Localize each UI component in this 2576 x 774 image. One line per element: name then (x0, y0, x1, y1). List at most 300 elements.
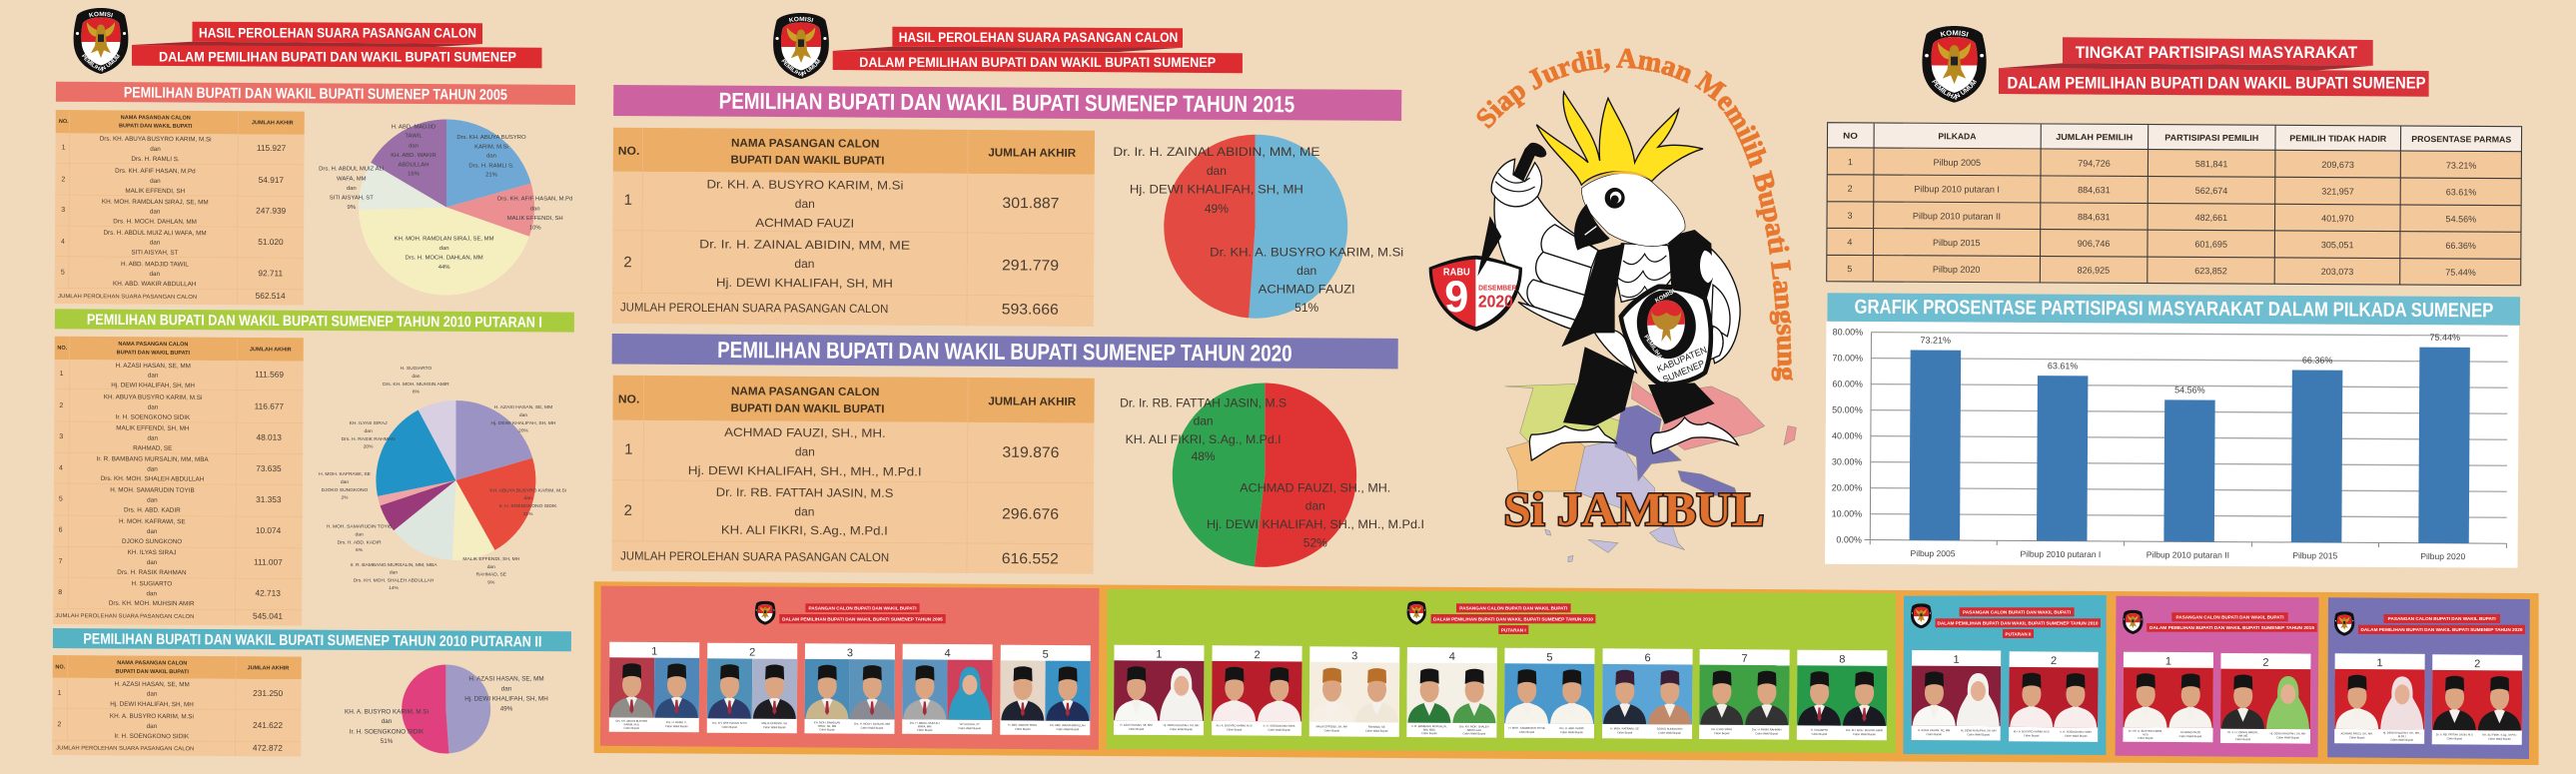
pie chart 2010 round I: dan (519, 412, 527, 418)
table 2005: Drs. H. MOCH. DAHLAN, MM (113, 218, 197, 226)
candidate card 8: Calon Wakil Bupati (1853, 732, 1876, 736)
table 2010 round I (53, 337, 304, 626)
table 2010 round II: 231.250 (253, 688, 284, 698)
panel: results 2005 (55, 82, 575, 306)
participation table: Pilbup 2015 (1933, 238, 1981, 248)
table 2010 round I: 7 (58, 558, 62, 565)
candidate card 2: MM, ME (2237, 734, 2248, 738)
y axis labels: 70.00% (1832, 353, 1863, 364)
y axis labels: 20.00% (1832, 482, 1862, 493)
pie chart 2020: KH. ALI FIKRI, S.Ag., M.Pd.I (1126, 432, 1282, 446)
value labels: 75.44% (2429, 333, 2460, 343)
pie chart 2020 (1120, 383, 1424, 567)
participation table: 54.56% (2446, 214, 2476, 224)
candidate card 1: Calon Bupati (2138, 736, 2153, 740)
table 2015 (612, 128, 1095, 327)
y axis labels: 80.00% (1833, 327, 1863, 338)
table 2015: 291.779 (1002, 257, 1059, 275)
candidate card 6: Calon Wakil Bupati (1658, 731, 1681, 735)
middle logo (773, 13, 829, 79)
participation table: 63.61% (2446, 187, 2476, 197)
heading 2020: PEMILIHAN BUPATI DAN WAKIL BUPATI SUMENEP TAHUN 2020 (717, 337, 1292, 367)
pie chart 2010 round I: Ir. R. BAMBANG MURSALIN, MM, MBA (351, 562, 437, 568)
candidate card 5: KH. ABD. WAKIR ABDULLAH (1050, 723, 1086, 727)
panel header 2020 (2334, 611, 2525, 636)
candidate card 1: KARIM, M.Si (624, 722, 639, 726)
date shield: 2020 (1478, 291, 1513, 312)
candidate card 2: KH. ALI FIKRI, S.Ag., M.Pd.I (2482, 733, 2517, 737)
right logo: KOMISI (1940, 30, 1969, 37)
candidate card 5: 5 (1043, 648, 1049, 661)
table 2015: Hj. DEWI KHALIFAH, SH, MH (716, 276, 893, 291)
table 2005: NO. (59, 119, 69, 125)
pie chart 2015: 51% (1294, 301, 1319, 315)
middle title banner: HASIL PEROLEHAN SUARA PASANGAN CALON (899, 29, 1178, 45)
candidate card 4: Drs. H. ABDUL MUIZ ALI (910, 721, 940, 725)
pie chart 2010 round I (319, 366, 566, 591)
candidate card 4 (902, 644, 993, 734)
pie chart 2005: KARIM, M.Si (474, 144, 508, 150)
panel header 2005: PASANGAN CALON BUPATI DAN WAKIL BUPATI (809, 605, 917, 611)
candidate card 4: ABDULLAH (1467, 728, 1481, 732)
table 2005: KH. MOH. RAMDLAN SIRAJ, SE, MM (102, 199, 209, 206)
crest (1536, 92, 1703, 185)
table 2010 round I: Hj. DEWI KHALIFAH, SH, MH (111, 382, 195, 389)
table 2005: Drs. H. RAMLI S. (131, 156, 180, 163)
participation table: 203,073 (2321, 267, 2353, 277)
candidate card 2: Calon Bupati (1227, 727, 1243, 731)
table 2010 round II: NO. (55, 664, 66, 670)
pie chart 2005: KH. ABD. WAKIR (391, 153, 436, 159)
pie chart 2020: 52% (1303, 535, 1327, 549)
candidate card 2: Calon Bupati (2235, 737, 2251, 741)
candidate card 1: M.Pd.I (2398, 734, 2406, 738)
table 2015: NO. (618, 146, 639, 158)
y axis labels: 10.00% (1832, 508, 1862, 519)
table 2010 round I: H. AZASI HASAN, SE, MM (116, 363, 191, 370)
candidate card 3: RAHMAD, SE (1368, 725, 1385, 729)
table 2020: dan (794, 504, 815, 518)
candidate card 3 (804, 643, 895, 734)
table 2010 round I: 3 (59, 433, 63, 440)
candidate card 7 (1699, 649, 1790, 740)
panel: results 2020 (612, 334, 1424, 574)
pie chart 2020: dan (1194, 414, 1214, 428)
table 2010 round I: 31.353 (256, 494, 282, 504)
candidate card 1 (2334, 653, 2425, 744)
panel header 2015 (2123, 610, 2317, 634)
candidate card 3: SIRAJ, SE, MM (818, 724, 837, 728)
table 2010 round I: 545.041 (253, 611, 283, 621)
pie chart 2010 round I: dan (487, 564, 495, 570)
table 2010 round I: NAMA PASANGAN CALON (118, 342, 188, 348)
table 2010 round II: 2 (57, 721, 61, 728)
value labels: 73.21% (1920, 336, 1951, 346)
candidate card 4: 4 (1449, 651, 1455, 663)
participation table: PEMILIH TIDAK HADIR (2289, 133, 2386, 144)
candidate card 1: H. AZASI HASAN, SE, MM (1120, 723, 1153, 727)
candidate card 5 (1000, 645, 1091, 735)
table 2020: BUPATI DAN WAKIL BUPATI (730, 402, 885, 415)
pie chart 2010 round II: 51% (381, 738, 394, 745)
table 2010 round II (52, 655, 302, 757)
table 2010 round I: 48.013 (256, 432, 282, 442)
table 2015: 1 (624, 192, 632, 209)
map of Sumenep (1505, 382, 1796, 562)
table 2010 round I: H. MOH. KAFRAWI, SE (119, 518, 186, 525)
candidate card 1: 1 (1954, 654, 1960, 666)
candidate card 3: 3 (847, 647, 853, 659)
raised wing (1494, 192, 1740, 373)
table 2010 round I: Drs. KH. MOH. SHALEH ABDULLAH (101, 475, 205, 483)
table 2010 round II: dan (147, 691, 158, 698)
pie chart 2010 round I: Drs. H. ABD. KADIR (338, 539, 382, 545)
table 2010 round I: 73.635 (256, 463, 282, 473)
candidate card 3: Calon Wakil Bupati (861, 726, 884, 730)
middle logo: PEMILIHAN UMUM (781, 59, 821, 77)
table 2010 round II: JUMLAH AKHIR (248, 665, 289, 671)
panel: candidates 2015 (2116, 596, 2319, 757)
table 2020: ACHMAD FAUZI, SH., MH. (724, 425, 886, 440)
pie chart 2015: Hj. DEWI KHALIFAH, SH, MH (1130, 183, 1303, 197)
table 2005: 54.917 (259, 175, 284, 185)
candidate card 1: 1 (2165, 655, 2171, 668)
pie chart 2005: 44% (438, 265, 450, 271)
table 2010 round I: KH. ILYAS SIRAJ (128, 549, 176, 556)
pie chart 2005: 10% (529, 225, 541, 231)
table 2010 round II: dan (147, 723, 158, 730)
value labels: 63.61% (2048, 361, 2078, 371)
candidate card 8 (1797, 650, 1887, 740)
candidate card 8: Drs. KH. MOH. MUHSIN AMIR (1846, 728, 1883, 732)
heading 2005: PEMILIHAN BUPATI DAN WAKIL BUPATI SUMENEP TAHUN 2005 (124, 84, 507, 104)
table 2010 round I: NO. (57, 346, 68, 352)
table 2015: JUMLAH AKHIR (988, 147, 1077, 160)
candidate card 1 (609, 642, 699, 732)
value labels (1920, 330, 2460, 396)
candidate card 4: Calon Wakil Bupati (1463, 731, 1486, 735)
pie chart 2015 (1113, 135, 1403, 319)
participation table: 581,841 (2195, 159, 2227, 169)
candidate card 1: 1 (651, 645, 657, 658)
participation table: Pilbup 2010 putaran I (1914, 184, 2000, 195)
candidate card 1: Calon Wakil Bupati (1170, 727, 1193, 731)
table 2005: dan (150, 271, 161, 278)
candidate card 2: 2 (1254, 649, 1261, 661)
chest and vest (1561, 230, 1715, 347)
candidate card 5: Calon Wakil Bupati (1056, 727, 1079, 731)
right logo (1922, 26, 1987, 103)
panel: results 2015 (612, 85, 1403, 327)
left logo: KOMISI (89, 12, 113, 18)
pie chart 2005: dan (486, 154, 496, 160)
beak (1574, 204, 1610, 251)
candidate card 4: Drs. KH. MOH. SHALEH (1459, 724, 1489, 729)
candidate card 5 (1504, 648, 1594, 738)
candidate card 2 (707, 643, 797, 733)
pie chart 2010 round I: H. AZASI HASAN, SE, MM (494, 404, 552, 410)
candidate card 6: 6 (1644, 652, 1651, 664)
right title banner: DALAM PEMILIHAN BUPATI DAN WAKIL BUPATI SUMENEP (2008, 74, 2425, 92)
candidate card 3: MALIK EFFENDI, SH, MH (1316, 724, 1347, 729)
y axis labels: 0.00% (1836, 534, 1862, 545)
table 2015: dan (794, 257, 815, 271)
pie chart 2020: Dr. Ir. RB. FATTAH JASIN, M.S (1120, 395, 1287, 409)
panel: candidates 2010 round I (1107, 589, 1896, 753)
x axis labels: Pilbup 2020 (2420, 551, 2466, 561)
participation table: 401,970 (2321, 214, 2354, 224)
y axis labels: 30.00% (1832, 456, 1862, 467)
table 2005: 3 (61, 207, 65, 214)
panel header 2020: DALAM PEMILIHAN BUPATI DAN WAKIL BUPATI SUMENEP TAHUN 2020 (2361, 627, 2523, 632)
pie chart 2010 round I: 14% (389, 585, 400, 591)
candidate card 3: Calon Bupati (819, 727, 835, 731)
candidate card 4: 4 (945, 647, 951, 660)
panel: candidates 2005 (600, 586, 1099, 750)
KPU shield: PEMILIHAN (1642, 335, 1665, 364)
candidate card 2: Calon Wakil Bupati (763, 725, 786, 729)
pie chart 2010 round I: 21% (523, 511, 533, 517)
table 2005: 4 (61, 239, 65, 246)
candidate card 2: Dr. Ir. RB. FATTAH JASIN, M.S (2436, 732, 2473, 737)
chart background (1825, 322, 2519, 568)
table 2020: JUMLAH AKHIR (988, 395, 1077, 408)
pie chart 2010 round I: dan (524, 495, 532, 501)
candidate card 4: Calon Bupati (1421, 731, 1437, 735)
table 2010 round I: BUPATI DAN WAKIL BUPATI (117, 350, 191, 357)
participation table: JUMLAH PEMILIH (2056, 132, 2133, 142)
participation table: 794,726 (2078, 158, 2111, 169)
table 2010 round I: dan (148, 404, 159, 411)
table 2005: H. ABD. MADJID TAWIL (121, 261, 189, 269)
table 2010 round II: 1 (58, 690, 62, 697)
table 2020: 1 (624, 441, 632, 458)
pie chart 2005: TAWIL (405, 134, 423, 140)
candidate card 3: Drs. H. MOCH. DAHLAN, MM (854, 722, 891, 726)
participation table: PILKADA (1938, 131, 1976, 141)
pie chart 2005: SITI AISYAH, ST (330, 195, 374, 201)
candidate card 2: 2 (749, 646, 755, 659)
candidate card 1: Hj. DEWI KHALIFAH, SH., MH., (2383, 731, 2421, 735)
table 2005: dan (150, 240, 161, 247)
candidate card 1: M.Si (2143, 732, 2148, 736)
pie chart 2010 round I: 9% (487, 579, 495, 585)
candidate card 5: H. MOH. SAMARUDIN TOYIB (1508, 726, 1545, 730)
middle title banner (833, 27, 1243, 73)
pie chart 2010 round I: Ir. H. SOENGKONO SIDIK (499, 503, 557, 509)
participation table: 562,674 (2195, 186, 2227, 196)
candidate card 4: Ir. R. BAMBANG MURSALIN, (1411, 724, 1447, 728)
pie chart 2010 round II: KH. A. BUSYRO KARIM, M.Si (345, 709, 429, 715)
table 2015: Dr. Ir. H. ZAINAL ABIDIN, MM, ME (699, 237, 910, 253)
table 2005: 2 (61, 177, 65, 184)
pie chart 2005: dan (439, 246, 449, 252)
pie chart 2010 round I: KH. ABUYA BUSYRO KARIM, M.Si (489, 487, 566, 493)
panel header 2010 round I: PUTARAN I (1501, 627, 1526, 632)
table 2005 (55, 110, 305, 306)
table 2010 round I: 116.677 (255, 401, 284, 411)
pie chart 2010 round II: Hj. DEWI KHALIFAH, SH, MH (464, 695, 548, 703)
candidate card 1: Calon Bupati (2349, 735, 2365, 739)
table 2010 round I: dan (147, 528, 158, 535)
pie chart 2010 round I: Drs. KH. MOH. SHALEH ABDULLAH (354, 577, 434, 583)
table 2010 round I: 42.713 (255, 588, 281, 598)
pie chart 2005: Drs. KH. ABUYA BUSYRO (456, 135, 526, 141)
participation table: 601,695 (2194, 239, 2227, 250)
table 2005: JUMLAH PEROLEHAN SUARA PASANGAN CALON (58, 294, 197, 301)
KPU shield: KOMISI (1654, 288, 1676, 305)
candidate card 1 (1912, 650, 2001, 741)
participation table: PARTISIPASI PEMILIH (2164, 133, 2258, 143)
pie chart 2010 round II: dan (382, 718, 393, 725)
participation table: 4 (1847, 237, 1852, 247)
panel header 2015: PASANGAN CALON BUPATI DAN WAKIL BUPATI (2175, 615, 2283, 619)
date shield: RABU (1443, 267, 1470, 279)
panel: candidates 2010 round II (1903, 595, 2107, 755)
panel: results 2010 round I (53, 309, 574, 626)
participation table: 2 (1848, 184, 1853, 194)
participation table: 5 (1847, 264, 1852, 274)
participation table: 482,661 (2195, 213, 2227, 223)
candidate card 1: Calon Wakil Bupati (2179, 734, 2202, 738)
table 2015: ACHMAD FAUZI (755, 216, 854, 231)
table 2010 round I: 6 (59, 527, 63, 534)
participation table: 73.21% (2446, 161, 2476, 171)
table 2005: 92.711 (258, 268, 284, 278)
table 2010 round I: dan (147, 590, 158, 597)
y axis labels: 50.00% (1832, 404, 1863, 415)
KPU shield: SUMENEP (1661, 359, 1706, 385)
table 2010 round I: dan (148, 435, 159, 442)
table 2010 round I: 4 (59, 465, 63, 472)
panel header 2010 round I (1407, 601, 1595, 634)
candidate card 2: Calon Wakil Bupati (2276, 735, 2299, 739)
pie chart 2005: Drs. H. ABDUL MUIZ ALI (319, 167, 385, 173)
table 2020: JUMLAH PEROLEHAN SUARA PASANGAN CALON (620, 548, 889, 564)
table 2010 round I: JUMLAH PEROLEHAN SUARA PASANGAN CALON (55, 613, 194, 620)
pie chart 2010 round I: RAHMAD, SE (476, 571, 507, 577)
candidate card 1 (2123, 652, 2213, 742)
pie chart 2010 round I: KH. ILYAS SIRAJ (350, 420, 388, 426)
date shield: 9 (1444, 272, 1468, 322)
table 2010 round II: 472.872 (253, 743, 283, 753)
pie chart 2005: dan (530, 207, 540, 213)
legs (1563, 347, 1715, 426)
candidate card 6: DJOKO SUNGKONO (1657, 727, 1682, 731)
table 2010 round I: Drs. H. RASIK RAHMAN (117, 569, 187, 576)
x axis labels: Pilbup 2015 (2292, 550, 2338, 560)
table 2010 round I: 5 (59, 496, 63, 503)
table 2010 round I: dan (147, 466, 158, 473)
candidate card 1: ACHMAD FAUZI, SH., MH. (2340, 731, 2373, 736)
panel: participation chart (1825, 293, 2520, 568)
pie chart 2010 round I: H. MOH. KAFRAWI, SE (319, 471, 372, 477)
table 2010 round I: Drs. KH. MOH. MUHSIN AMIR (109, 600, 195, 607)
table 2010 round I: 2 (59, 402, 63, 409)
table 2005: 1 (62, 145, 66, 152)
table 2010 round I: dan (148, 373, 159, 380)
table 2010 round I: 111.007 (254, 557, 283, 567)
panel header 2010 round II: PASANGAN CALON BUPATI DAN WAKIL BUPATI (1963, 609, 2071, 615)
pie chart 2010 round I: H. MOH. SAMARUDIN TOYIB (327, 523, 392, 529)
table 2020: 616.552 (1002, 550, 1059, 567)
table 2010 round I: RAHMAD, SE (133, 444, 172, 452)
date shield (1429, 256, 1522, 332)
pie chart 2005: Drs. H. MOCH. DAHLAN, MM (405, 256, 483, 262)
pie chart 2010 round II: H. AZASI HASAN, SE, MM (468, 675, 544, 683)
crest band (1581, 171, 1653, 186)
table 2020 (612, 376, 1095, 574)
table 2015: JUMLAH PEROLEHAN SUARA PASANGAN CALON (620, 300, 888, 316)
right logo: PEMILIHAN UMUM (1932, 80, 1978, 100)
participation table: 3 (1848, 211, 1853, 221)
table 2015: 2 (623, 254, 632, 271)
candidate card 2 (1212, 645, 1302, 736)
table 2020: 319.876 (1002, 444, 1060, 461)
panel header 2010 round II: PUTARAN II (2006, 631, 2031, 636)
candidate card 4: WAFA, MM (918, 724, 932, 728)
table 2020: 296.676 (1002, 505, 1059, 523)
value labels: 54.56% (2174, 385, 2205, 395)
candidate card 6: H. MOH. KAFRAWI, SE (1610, 726, 1639, 731)
table 2010 round I: Drs. H. ABD. KADIR (124, 506, 181, 514)
table 2005: 562.514 (256, 291, 286, 301)
table 2010 round II: Ir. H. SOENGKONO SIDIK (115, 733, 190, 740)
candidate card 2: Calon Wakil Bupati (2488, 737, 2511, 741)
participation table: 884,631 (2078, 185, 2111, 195)
candidate card 5: 5 (1546, 651, 1553, 664)
table 2005: dan (150, 209, 161, 216)
panel header 2015: DALAM PEMILIHAN BUPATI DAN WAKIL BUPATI SUMENEP TAHUN 2015 (2149, 625, 2314, 630)
right title banner (1999, 37, 2429, 97)
candidate card 5: Drs. H. ABD. KADIR (1559, 726, 1584, 730)
right title banner: TINGKAT PARTISIPASI MASYARAKAT (2076, 43, 2358, 62)
panel header 2010 round II: DALAM PEMILIHAN BUPATI DAN WAKIL BUPATI SUMENEP TAHUN 2010 (1938, 621, 2099, 625)
pie chart 2010 round I: dan (365, 428, 373, 434)
candidate card 1: Calon Wakil Bupati (1967, 732, 1990, 736)
table 2020: 2 (624, 502, 632, 519)
pie chart 2015: ACHMAD FAUZI (1259, 283, 1355, 297)
pie chart 2015: Dr. KH. A. BUSYRO KARIM, M.Si (1210, 245, 1403, 259)
candidate card 1: Dr. KH. A. BUSYRO KARIM, (2129, 729, 2162, 733)
pie chart 2005: Drs. H. RAMLI S. (468, 163, 514, 169)
table 2005: KH. ABD. WAKIR ABDULLAH (113, 281, 197, 288)
participation table: 75.44% (2445, 268, 2476, 278)
pie chart 2010 round II: 49% (500, 705, 513, 713)
pie chart 2005: WAFA, MM (337, 176, 367, 182)
pie chart 2010 round II (345, 664, 548, 753)
participation table: NO (1843, 131, 1858, 141)
left title banner: DALAM PEMILIHAN BUPATI DAN WAKIL BUPATI SUMENEP (159, 48, 516, 64)
candidate card 1: Calon Bupati (624, 726, 639, 730)
table 2005: Drs. KH. AFIF HASAN, M.Pd (115, 168, 196, 175)
table 2005: SITI AISYAH, ST (131, 249, 179, 257)
table 2015: 301.887 (1002, 195, 1060, 212)
table 2005: MALIK EFFENDI, SH (125, 188, 186, 195)
pie chart 2015: dan (1207, 164, 1227, 178)
table 2005: 115.927 (257, 143, 287, 153)
candidate card 5: Calon Wakil Bupati (1560, 730, 1583, 734)
table 2005: 5 (61, 270, 65, 277)
x axis labels: Pilbup 2010 putaran I (2020, 549, 2101, 559)
mascot name: Si JAMBUL (1504, 483, 1764, 536)
candidate card 1 (1114, 645, 1204, 735)
pie chart 2010 round I: 2% (341, 495, 349, 501)
table 2010 round I: KH. ABUYA BUSYRO KARIM, M.Si (104, 393, 202, 401)
panel header 2005 (755, 601, 946, 625)
candidate card 4 (1406, 647, 1497, 738)
pie chart 2005: MALIK EFFENDI, SH (507, 216, 563, 222)
